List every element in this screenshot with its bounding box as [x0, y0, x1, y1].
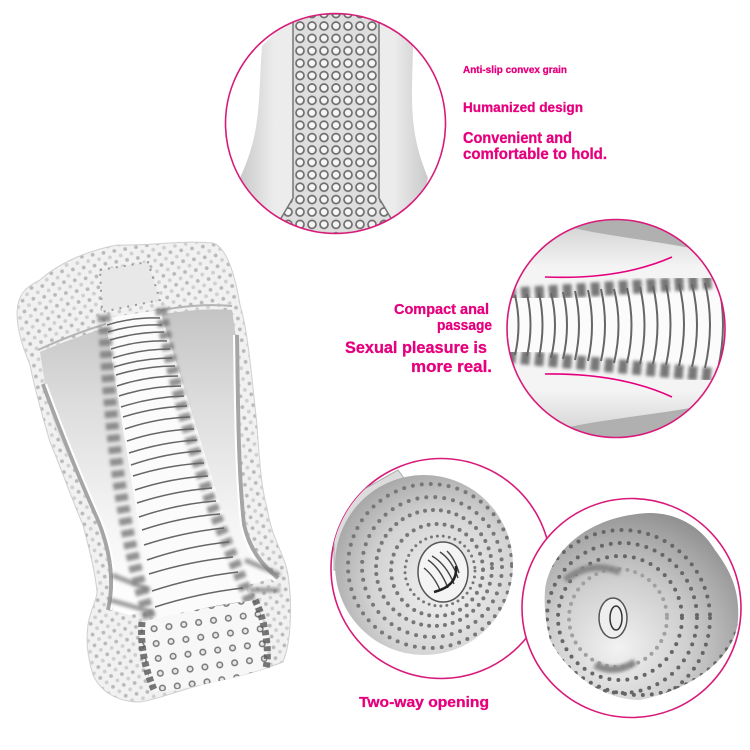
caption: convenient: Convenient and	[463, 130, 572, 147]
circle panel: second opening	[522, 485, 745, 718]
inner tube	[105, 310, 250, 625]
lower ridges	[507, 356, 725, 376]
caption: comfortable: comfortable to hold.	[463, 146, 607, 163]
tube left ridges	[104, 315, 152, 625]
bottom band	[570, 408, 689, 437]
right edge highlight	[237, 335, 278, 578]
tube neck at top cap	[100, 262, 160, 312]
cap rim line	[38, 305, 232, 350]
top band	[575, 220, 688, 248]
hole ribs	[424, 551, 459, 590]
clear centre window	[40, 309, 277, 615]
ribs	[515, 282, 723, 369]
opening hole	[418, 542, 468, 602]
caption: sexual pleasure: Sexual pleasure is	[345, 338, 487, 357]
text: anti-slip feature	[463, 64, 607, 163]
pink accent curve top	[545, 257, 672, 277]
cylinder behind opening	[334, 470, 404, 570]
concentric dots	[348, 484, 512, 648]
opening inner mark	[610, 606, 622, 630]
caption: anti-slip: Anti-slip convex grain	[463, 64, 567, 76]
grip body	[240, 24, 428, 218]
caption: more real: more real.	[411, 357, 492, 376]
second opening dome	[545, 513, 738, 700]
panel dark side left	[142, 622, 155, 692]
main product illustration	[17, 242, 291, 702]
circle panel: first opening	[331, 458, 551, 678]
passage background	[514, 228, 712, 426]
text: compact passage	[345, 301, 492, 376]
bottom dotted panel	[142, 600, 267, 692]
left edge highlight	[43, 384, 111, 610]
dome surface detail	[545, 528, 738, 697]
circle panel: anti-slip grain close-up	[226, 14, 446, 240]
bottom base dark bands	[110, 560, 280, 612]
small opening	[599, 598, 627, 638]
caption: two-way opening: Two-way opening	[359, 694, 489, 711]
product outer shell	[17, 242, 291, 702]
panel dark side right	[255, 600, 267, 668]
caption: passage: passage	[437, 317, 492, 334]
concentric dots	[545, 528, 738, 697]
left edge white line	[46, 384, 114, 610]
opening dome	[335, 475, 513, 655]
caption: compact: Compact anal	[394, 301, 489, 318]
upper ridges	[507, 281, 725, 295]
tube interior	[507, 280, 725, 378]
shadow bands	[565, 568, 635, 669]
right edge white line	[234, 335, 275, 581]
tube right ridges	[161, 308, 250, 602]
grain column	[280, 14, 392, 240]
circle panel: inner passage close-up	[507, 219, 725, 440]
caption: humanized: Humanized design	[463, 99, 583, 115]
hole shadow	[434, 566, 456, 592]
tube ribs	[107, 318, 247, 622]
pink accent curve bottom	[545, 374, 672, 397]
